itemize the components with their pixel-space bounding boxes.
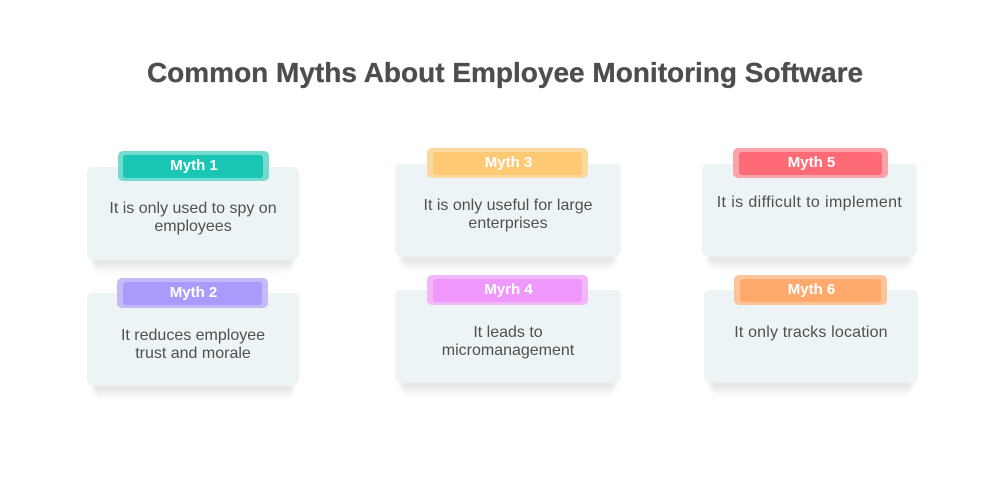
text: myth 3 statement: It is only useful for large [424,197,592,214]
card shadow [707,256,912,271]
card shadow [400,382,616,397]
badge: myth 6 [734,275,887,305]
text: myth 4 statement: It leads to [473,324,543,341]
card background [395,290,621,382]
badge: myth 6: Myth 6 [788,281,835,298]
card background [87,167,299,259]
panel: myth 4 [395,275,621,394]
text: myth 3 statement [424,197,592,232]
text: myth 1 statement [109,200,277,235]
badge: myth 3 [427,148,588,178]
text: myth 4 statement [442,324,574,359]
text: myth 2 statement [121,327,265,362]
panel: myth 5 [702,148,917,268]
panel: myth 2 [87,278,299,396]
badge: myth 5 [733,148,888,178]
badge: myth 4: Myrh 4 [484,281,533,298]
panel: myth 1 [87,151,299,270]
text: myth 2 statement: It reduces employee [121,327,265,344]
text: myth 3 statement: enterprises [468,215,548,232]
card background [704,290,918,382]
text: myth 4 statement: micromanagement [442,342,574,359]
panel: myth 3 [395,148,621,268]
badge: myth 4 [427,275,588,305]
card shadow [92,259,294,274]
badge: myth 1 [118,151,269,181]
text: myth 6 statement: It only tracks location [734,324,888,341]
badge: myth 2: Myth 2 [170,284,217,301]
badge: myth 2 [117,278,268,308]
card shadow [92,385,294,400]
card background [702,164,917,256]
card shadow [400,256,616,271]
card background [87,293,299,385]
text: myth 5 statement: It is difficult to implement [717,194,902,211]
card background [395,164,621,256]
text: myth 1 statement: employees [154,218,232,235]
title: Common Myths About Employee Monitoring Software [147,57,863,88]
card shadow [709,382,913,397]
text: myth 1 statement: It is only used to spy on [109,200,277,217]
badge: myth 1: Myth 1 [170,157,218,174]
panel: myth 6 [704,275,918,394]
badge: myth 3: Myth 3 [485,154,532,171]
text: myth 2 statement: trust and morale [135,345,251,362]
badge: myth 5: Myth 5 [788,154,835,171]
